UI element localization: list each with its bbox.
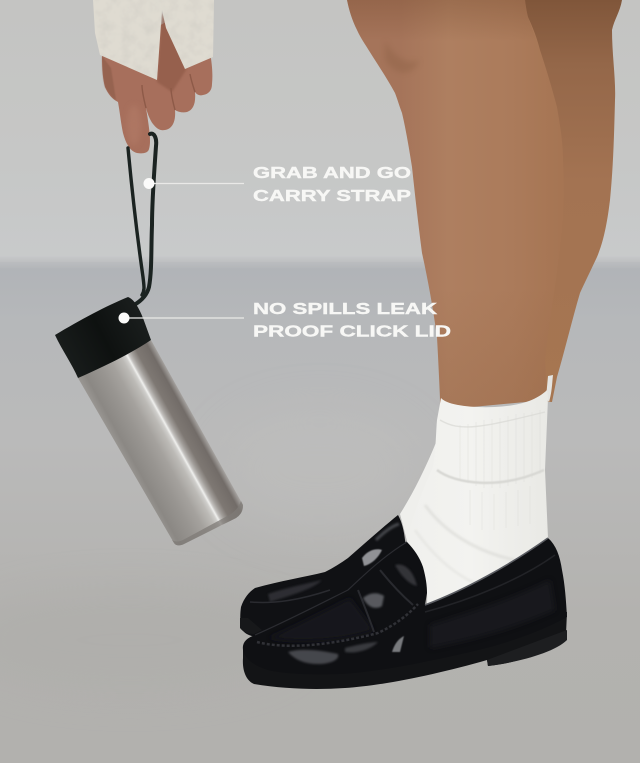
shoe highlights [363, 593, 384, 608]
fingertip [127, 105, 141, 145]
vamp edge [255, 542, 407, 635]
back sock tip [546, 375, 553, 402]
penny strap and stitching [257, 604, 418, 646]
body bottom edge shade [172, 501, 243, 545]
leader line [124, 317, 244, 319]
marker dot [118, 312, 130, 324]
steel body [78, 340, 243, 545]
callout text [253, 301, 451, 340]
back sock [400, 440, 450, 560]
back leg [520, 0, 622, 402]
heel [487, 630, 567, 666]
sock ribs and folds [415, 410, 545, 585]
palm and fingers [102, 20, 212, 153]
callout text: GRAB AND GO [253, 165, 411, 182]
insulated bottle [55, 297, 243, 545]
leg vertical shading [347, 0, 563, 410]
back shoe welt [240, 618, 262, 634]
callout: carry strap [144, 165, 411, 205]
legs [347, 0, 622, 410]
black lid [55, 297, 151, 378]
front sock [407, 390, 548, 604]
leader line [149, 182, 244, 184]
front shoe [243, 538, 567, 689]
callout text: NO SPILLS LEAK [253, 301, 438, 318]
finger shading [142, 74, 195, 110]
callout text: PROOF CLICK LID [253, 324, 451, 340]
front leg [347, 0, 564, 410]
shoe collar edge [425, 538, 548, 605]
carry strap [128, 134, 156, 305]
callout: click lid [118, 301, 451, 340]
callout text [253, 165, 411, 205]
marker dot [144, 178, 154, 189]
back shoe highlights [268, 580, 322, 602]
front shoe upper [243, 538, 567, 674]
knee shadow [385, 40, 420, 73]
front shoe sole [243, 612, 567, 689]
back shoe upper [240, 515, 410, 637]
shirt cuff [93, 0, 214, 80]
hand [93, 0, 214, 153]
callout text: CARRY STRAP [253, 188, 411, 205]
back shoe [240, 515, 410, 637]
vamp lighter surface [268, 598, 374, 641]
